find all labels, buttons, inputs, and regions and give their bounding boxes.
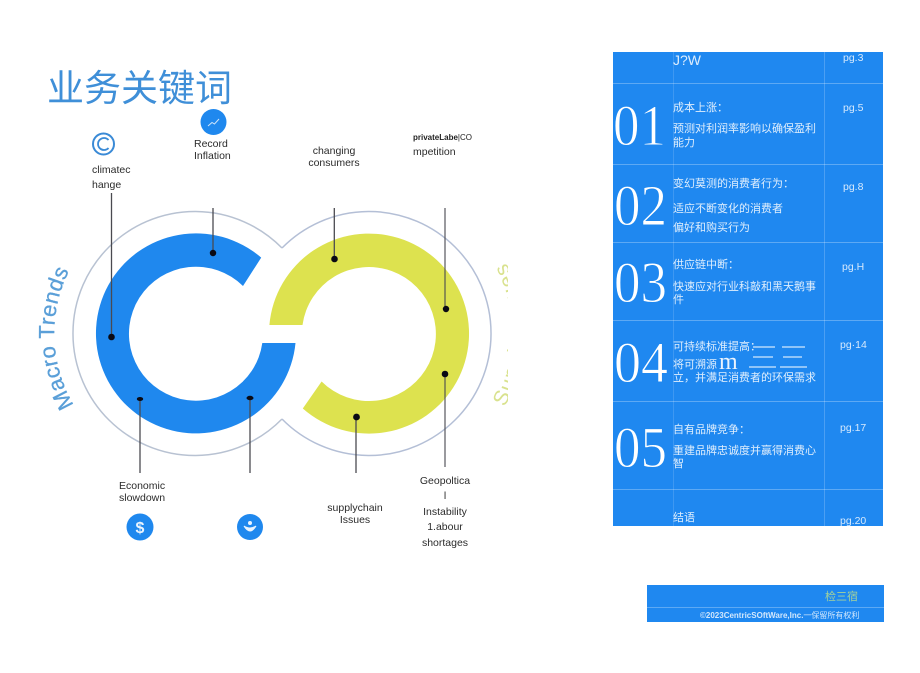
row: 01 rising costs: 成本上涨： bbox=[673, 100, 728, 114]
callout: geopolitical instability and labour shortages: l bbox=[444, 490, 446, 502]
row: 03 supply chain disruption: 件 bbox=[673, 293, 684, 306]
row: 04 sustainability: 将可溯源 bbox=[673, 357, 717, 371]
row: 04 sustainability: pg·14 bbox=[840, 339, 867, 351]
callout: changing consumers: changing bbox=[313, 145, 355, 157]
callout: record inflation: Record bbox=[194, 138, 228, 150]
row: 02 changing consumers: pg.8 bbox=[843, 181, 864, 193]
row: conclusion bbox=[673, 511, 866, 527]
row: intro: J?W bbox=[673, 52, 702, 68]
row: 03 supply chain disruption bbox=[616, 258, 864, 304]
row: 01 rising costs: 预测对利润率影响以确保盈利 bbox=[673, 121, 816, 135]
row: 04 sustainability: 可持续标准提高： bbox=[673, 339, 761, 353]
row: conclusion: pg.20 bbox=[840, 515, 866, 527]
icon: inflation trend bbox=[200, 109, 226, 135]
row: conclusion: 结语 bbox=[673, 511, 695, 524]
diagram: macro trends and supply rings bbox=[38, 210, 508, 456]
callout: private label competition bbox=[413, 133, 472, 312]
callout: supply chain issues: supplychain bbox=[327, 502, 383, 514]
callout: climate change: hange bbox=[92, 179, 121, 191]
callout: supply chain issues bbox=[327, 414, 383, 526]
row: 02 changing consumers bbox=[616, 178, 863, 232]
panel: table of contents bbox=[613, 52, 883, 527]
panel: footer: 检三宿 bbox=[825, 589, 858, 603]
icon: dollar bbox=[126, 514, 154, 540]
callout: record inflation bbox=[194, 109, 231, 256]
callout: geopolitical instability and labour shortages: Instability bbox=[423, 506, 468, 518]
callout: geopolitical instability and labour shortages: Geopoltica bbox=[420, 475, 470, 487]
curved label: supply issues: Supply Issues bbox=[494, 264, 508, 405]
icon: hand and person bbox=[237, 514, 263, 540]
callout: geopolitical instability and labour shortages: 1.abour bbox=[427, 521, 463, 533]
row: 05 private label competition: 智 bbox=[673, 456, 684, 470]
callout: unlabeled trend with people icon bbox=[237, 396, 263, 540]
callout: private label competition: mpetition bbox=[413, 146, 456, 158]
callout: climate change: climatec bbox=[92, 164, 131, 176]
callout: changing consumers bbox=[308, 145, 360, 262]
row: 05 private label competition: 05 bbox=[614, 415, 667, 480]
row: 03 supply chain disruption: 快速应对行业科敲和黑天鹅事 bbox=[673, 279, 816, 293]
title: 业务关键词 bbox=[47, 68, 232, 109]
callout: private label competition: privateLabe|CO bbox=[413, 133, 472, 142]
row: 05 private label competition: pg.17 bbox=[840, 422, 866, 434]
row: 03 supply chain disruption: 供应链中断： bbox=[673, 257, 739, 271]
row: 04 sustainability bbox=[616, 340, 867, 383]
row: 02 changing consumers: 02 bbox=[614, 173, 667, 238]
row: 04 sustainability: 04 bbox=[614, 330, 668, 395]
row: 05 private label competition: 自有品牌竞争： bbox=[673, 422, 750, 436]
callout: supply chain issues: Issues bbox=[340, 514, 370, 526]
row: 02 changing consumers: 偏好和购买行为 bbox=[673, 220, 750, 234]
row: intro bbox=[673, 54, 863, 65]
outer outline: right loop bbox=[282, 211, 491, 455]
row: 04 sustainability: 立，并满足消费者的环保需求 bbox=[673, 370, 816, 384]
callout: geopolitical instability and labour shortages bbox=[420, 371, 470, 549]
row: 01 rising costs: pg.5 bbox=[843, 102, 864, 114]
row: 03 supply chain disruption: pg.H bbox=[842, 261, 864, 273]
row: 01 rising costs: 01 bbox=[613, 93, 666, 158]
callout: economic slowdown: slowdown bbox=[119, 492, 165, 504]
row: 01 rising costs bbox=[615, 102, 863, 148]
callout: climate change bbox=[92, 134, 131, 340]
panel: footer bbox=[647, 585, 884, 622]
panel: footer: ©2023CentricSOftWare,Inc.一保留所有权利 bbox=[700, 610, 859, 620]
row: 01 rising costs: 能力 bbox=[673, 135, 695, 149]
callout: geopolitical instability and labour shortages: shortages bbox=[422, 537, 468, 549]
callout: record inflation: Inflation bbox=[194, 150, 231, 162]
row: 02 changing consumers: 适应不断变化的消费者 bbox=[673, 201, 783, 215]
blue ring bbox=[96, 233, 296, 433]
row: 03 supply chain disruption: 03 bbox=[614, 250, 667, 315]
outer outline: left loop bbox=[73, 211, 282, 455]
row: intro: pg.3 bbox=[843, 52, 864, 64]
icon: dollar: $ bbox=[136, 520, 145, 537]
row: 04 sustainability: m bbox=[719, 349, 738, 375]
curved label: macro trends: Macro Trends bbox=[38, 268, 74, 411]
callout: changing consumers: consumers bbox=[308, 157, 360, 169]
row: 02 changing consumers: 变幻莫测的消费者行为： bbox=[673, 176, 794, 190]
row: 05 private label competition bbox=[616, 424, 866, 468]
row: 05 private label competition: 重建品牌忠诚度并赢得消费心 bbox=[673, 443, 816, 457]
callout: economic slowdown: Economic bbox=[119, 480, 165, 492]
icon: copyright circle bbox=[93, 134, 114, 154]
callout: economic slowdown bbox=[119, 397, 165, 540]
yellow ring bbox=[269, 234, 469, 434]
